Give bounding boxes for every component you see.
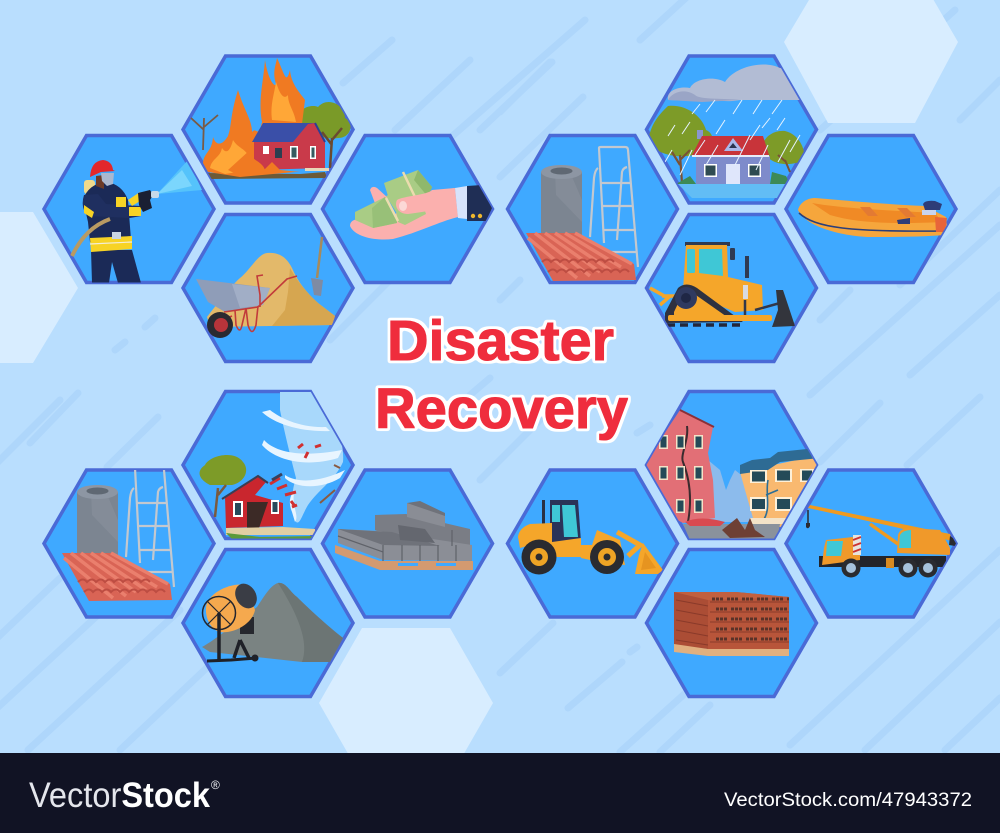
- footer url: VectorStock.com/47943372: [724, 790, 972, 811]
- icon: yellow wheel loader: [518, 500, 663, 574]
- icon: cement mixer with gravel pile: [202, 580, 343, 662]
- footer logo: VectorStock: [29, 776, 210, 815]
- panel: brick stack: [646, 550, 816, 696]
- panel: wheel loader: [508, 470, 678, 617]
- panel: tornado: [183, 392, 353, 539]
- panel: sand and wheelbarrow: [183, 214, 353, 362]
- icon: sand pile with wheelbarrow and shovel: [196, 237, 335, 338]
- icon: crane truck: [806, 505, 957, 578]
- icon: mesh roll, ladder, tiles: [526, 147, 638, 281]
- panel: concrete blocks: [322, 470, 492, 617]
- pale hexagon: bottom: [319, 628, 493, 778]
- registered mark: ®: [211, 778, 220, 792]
- icon: flooded house in rain: [648, 64, 804, 198]
- panel: firefighter: [44, 136, 214, 283]
- panel: mesh, ladder and roof tiles: [508, 136, 678, 282]
- icon: mesh roll, ladder, tiles: [62, 467, 174, 601]
- footer bar: [0, 753, 1000, 833]
- icon: pallet of bricks: [674, 592, 789, 656]
- panel: mobile crane: [786, 470, 957, 617]
- panel: house fire: [183, 56, 353, 203]
- panel: flood: [646, 56, 816, 203]
- icon: burning house: [191, 58, 350, 179]
- panel: inflatable boat: [786, 136, 956, 282]
- icon: tornado destroying house: [200, 392, 345, 539]
- pale hexagon: left: [0, 212, 78, 363]
- icon: yellow bulldozer: [650, 242, 795, 327]
- icon: orange rescue boat: [798, 198, 947, 237]
- heading: Recovery: Recovery: [375, 377, 628, 441]
- icon: firefighter with hose: [72, 160, 202, 283]
- icon: hand holding cash bundles: [350, 170, 492, 239]
- icon: cinder blocks on pallet: [335, 501, 473, 570]
- panel: mesh, ladder and roof tiles (lower): [44, 467, 214, 617]
- icon: cracked buildings after earthquake: [640, 410, 820, 540]
- pale hexagon: top right: [784, 0, 958, 123]
- panel: bulldozer: [646, 214, 816, 362]
- title: [375, 309, 628, 441]
- panel: earthquake: [640, 392, 820, 540]
- heading: Disaster: Disaster: [387, 309, 614, 373]
- panel: money in hand: [322, 136, 492, 282]
- panel: concrete mixer and gravel: [183, 550, 353, 696]
